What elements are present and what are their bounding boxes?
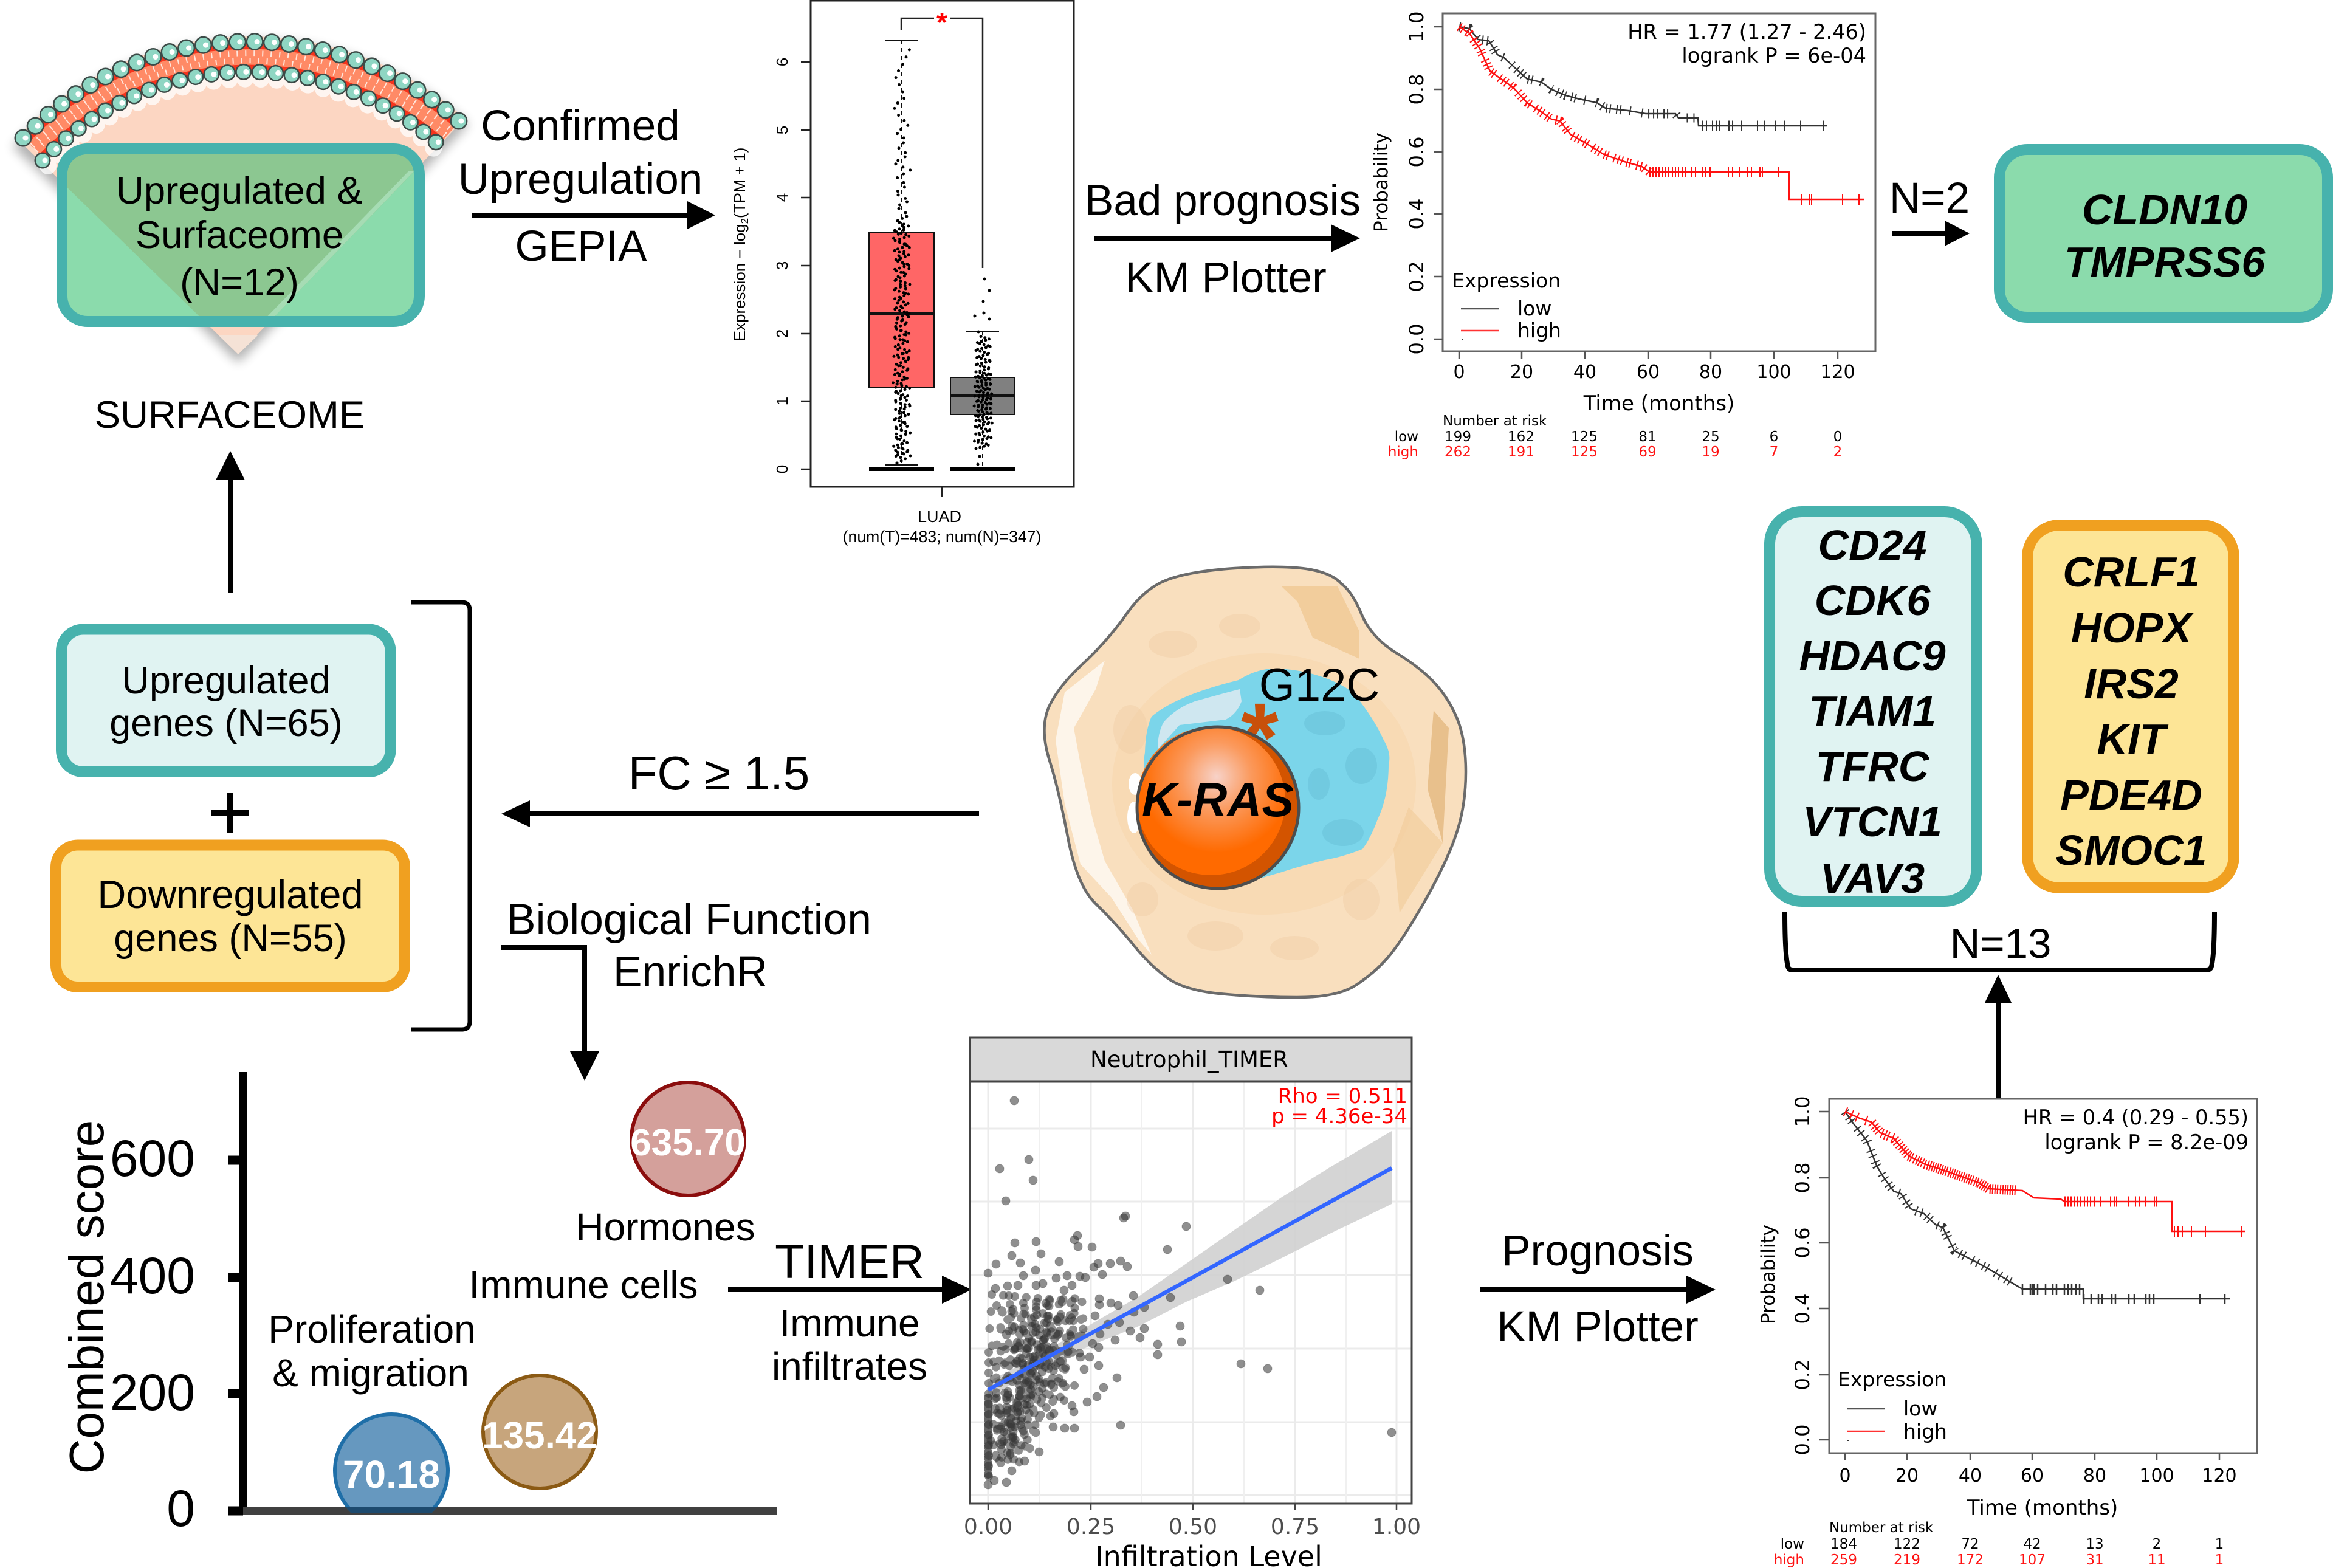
number at risk table: 162 (1508, 429, 1534, 445)
arrow: to CLDN10 TMPRSS6 box (1892, 221, 1970, 246)
strip header (970, 1037, 1412, 1081)
number at risk table: high (1388, 444, 1418, 460)
hazard ratio annotation: logrank P = 6e-04 (1682, 44, 1866, 67)
label: prognosis KM plotter: Prognosis (1502, 1227, 1694, 1275)
label: biological function EnrichR: Biological Function (507, 895, 871, 944)
axes (1757, 1096, 2257, 1520)
label: FC threshold: FC ≥ 1.5 (628, 746, 809, 800)
significance bracket: * (936, 7, 947, 38)
gene list: downregulated: KIT (2097, 715, 2169, 763)
legend: high (1517, 318, 1561, 342)
arrow: to bottom KM plot (1480, 1276, 1716, 1304)
illustration: cell with K-RAS (1044, 567, 1466, 997)
number at risk table: Number at risk (1829, 1520, 1934, 1536)
number at risk table: 81 (1638, 429, 1657, 445)
y axis and frame: 1 (773, 397, 791, 405)
box: upregulated and surfaceome: Upregulated & (116, 170, 363, 212)
y axis and frame (730, 1, 1074, 497)
low curve (1459, 27, 1827, 126)
number at risk table: high (1774, 1552, 1804, 1568)
arrow: up to surfaceome (216, 451, 245, 593)
box: downregulated genes: Downregulated (97, 872, 363, 916)
number at risk table: 259 (1830, 1552, 1857, 1568)
number at risk table: 107 (2019, 1552, 2046, 1568)
axes: 120 (1820, 362, 1855, 383)
gene list: upregulated: TFRC (1816, 743, 1930, 790)
label: N=2: N=2 (1889, 174, 1970, 222)
plot frame and grid (970, 1082, 1412, 1504)
arrow: cell to genes (501, 800, 979, 827)
axes: 20 (1510, 362, 1533, 383)
label: prognosis KM plotter (1497, 1227, 1699, 1351)
label: confirmed upregulation GEPIA: GEPIA (515, 222, 647, 270)
number at risk table: 0 (1833, 429, 1842, 445)
chart: combined score bubble plot (60, 1072, 777, 1537)
hazard ratio annotation (1627, 20, 1866, 67)
axis and labels (964, 1082, 1421, 1568)
legend: Expression (1452, 269, 1561, 292)
number at risk table: 125 (1571, 444, 1598, 460)
label: bad prognosis KM plotter: Bad prognosis (1085, 177, 1361, 225)
cell shading (1056, 586, 1449, 960)
label: confirmed upregulation GEPIA: Confirmed (481, 102, 680, 150)
icon: plus sign (211, 793, 249, 833)
bubble labels: Proliferation (268, 1307, 476, 1351)
axes: 0.8 (1405, 74, 1428, 105)
label: TIMER immune infiltrates: infiltrates (772, 1344, 927, 1388)
legend: high (1903, 1420, 1947, 1443)
axis and labels: 0.00 (964, 1515, 1012, 1539)
number at risk table: low (1395, 429, 1418, 445)
hazard ratio annotation: HR = 1.77 (1.27 - 2.46) (1627, 20, 1866, 44)
number at risk table: 219 (1894, 1552, 1920, 1568)
axes: 80 (2083, 1465, 2106, 1487)
asterisk mutation mark: * (1241, 683, 1279, 791)
axes: 1.0 (1791, 1096, 1814, 1127)
number at risk table: 25 (1702, 429, 1720, 445)
high curve (1459, 27, 1864, 205)
legend (1838, 1367, 1947, 1443)
number at risk table (1388, 413, 1842, 460)
gene list: downregulated (2027, 525, 2234, 888)
number at risk table: 19 (1702, 444, 1720, 460)
box: upregulated genes: Upregulated (122, 659, 331, 702)
axes: 100 (1756, 362, 1792, 383)
label: confirmed upregulation GEPIA (458, 102, 703, 270)
box: upregulated and surfaceome: (N=12) (180, 261, 299, 304)
bubble labels: Immune cells (469, 1263, 698, 1307)
gene list: upregulated: CD24 (1818, 521, 1926, 569)
nucleus (1144, 669, 1389, 879)
heading: SURFACEOME: SURFACEOME (95, 394, 365, 436)
axes: 60 (1637, 362, 1660, 383)
axes: 0 (1839, 1465, 1851, 1487)
low curve (1845, 1112, 2230, 1304)
number at risk table: 199 (1445, 429, 1471, 445)
axes: 0.0 (1405, 324, 1428, 354)
axes: 0.2 (1405, 261, 1428, 292)
y axis and frame: 2 (773, 329, 791, 338)
label: biological function EnrichR: EnrichR (613, 947, 768, 996)
number at risk table: 42 (2023, 1536, 2041, 1552)
axis: 0 (167, 1480, 195, 1537)
high curve (1845, 1112, 2245, 1237)
x axis labels: (num(T)=483; num(N)=347) (843, 528, 1041, 546)
axes: 120 (2202, 1465, 2237, 1487)
number at risk table: 125 (1571, 429, 1598, 445)
bracket: gene groups (411, 602, 470, 1030)
y axis and frame: Expression − log (730, 224, 749, 341)
bubble: immune cells: 135.42 (482, 1415, 597, 1457)
chart: Neutrophil TIMER scatter (964, 1037, 1421, 1568)
bracket: N=13: N=13 (1950, 920, 2051, 967)
hazard ratio annotation: HR = 0.4 (0.29 - 0.55) (2023, 1106, 2249, 1129)
box: upregulated and surfaceome (57, 143, 425, 327)
axis and labels: 0.75 (1271, 1515, 1319, 1539)
bubble: proliferation and migration: 70.18 (343, 1453, 440, 1496)
gene list: downregulated: IRS2 (2084, 660, 2179, 707)
hazard ratio annotation (2023, 1106, 2249, 1154)
correlation annotation: Rho = 0.511 (1278, 1084, 1407, 1109)
axis: 200 (110, 1364, 195, 1421)
gene list: upregulated (1770, 512, 1976, 902)
label: bad prognosis KM plotter: KM Plotter (1125, 254, 1327, 302)
axes: Time (months) (1583, 391, 1734, 416)
number at risk table: 122 (1894, 1536, 1920, 1552)
y axis and frame: (TPM + 1) (730, 148, 749, 218)
membrane blebs (1127, 773, 1142, 833)
bubble: immune cells (482, 1375, 597, 1488)
box: upregulated genes: genes (N=65) (109, 702, 343, 744)
number at risk table: 2 (1833, 444, 1842, 460)
number at risk table: 13 (2086, 1536, 2104, 1552)
scatter points (984, 1096, 1396, 1489)
axis and labels: 0.50 (1169, 1515, 1217, 1539)
cell body (1044, 567, 1466, 997)
label: prognosis KM plotter: KM Plotter (1497, 1303, 1699, 1351)
axis: 400 (110, 1247, 195, 1304)
axis: Combined score (60, 1120, 114, 1474)
icon: membrane fan (13, 36, 469, 363)
number at risk table: 191 (1508, 444, 1534, 460)
arrow: to box plot (472, 201, 715, 229)
box: upregulated and surfaceome: Surfaceome (136, 214, 343, 256)
number at risk table: 7 (1770, 444, 1778, 460)
y axis and frame: 5 (773, 126, 791, 134)
axis and labels: 0.25 (1067, 1515, 1115, 1539)
legend: low (1903, 1397, 1937, 1420)
box: CLDN10 and TMPRSS6: TMPRSS6 (2064, 238, 2266, 286)
correlation annotation: p = 4.36e-34 (1271, 1104, 1407, 1129)
bubble: hormones (630, 1082, 746, 1195)
axis (60, 1072, 777, 1537)
number at risk table: 72 (1961, 1536, 1979, 1552)
arrow: prognosis up to N=13 (1985, 975, 2012, 1098)
gene list: downregulated: HOPX (2071, 604, 2194, 652)
label: confirmed upregulation GEPIA: Upregulation (458, 156, 703, 204)
axes: 80 (1699, 362, 1722, 383)
y axis and frame: 3 (773, 261, 791, 270)
number at risk table: 172 (1957, 1552, 1984, 1568)
axes: 0.6 (1791, 1228, 1814, 1258)
number at risk table: 184 (1830, 1536, 1857, 1552)
bubble labels: & migration (272, 1351, 469, 1395)
bubble: proliferation and migration (333, 1412, 450, 1513)
axes (1370, 12, 1875, 416)
bubble labels: Hormones (576, 1205, 755, 1249)
bubble labels (268, 1205, 755, 1395)
y axis and frame: 6 (773, 58, 791, 66)
arrow: to top KM plot (1094, 224, 1360, 252)
x axis labels (843, 507, 1041, 546)
axis: 600 (110, 1130, 195, 1187)
legend: Expression (1838, 1367, 1946, 1391)
number at risk table: 31 (2086, 1552, 2104, 1568)
number at risk table: 262 (1445, 444, 1471, 460)
number at risk table: 6 (1770, 429, 1778, 445)
axes: 0.0 (1791, 1425, 1814, 1455)
strip header: Neutrophil_TIMER (1090, 1047, 1288, 1073)
tumor points (893, 46, 911, 463)
confidence band (988, 1131, 1392, 1398)
panel: surfaceome membrane fan with upregulated and surfaceome box (13, 36, 469, 363)
gene list: upregulated: HDAC9 (1799, 632, 1946, 679)
x axis labels: LUAD (918, 507, 961, 526)
gene list: downregulated: PDE4D (2060, 771, 2202, 819)
regression line (988, 1168, 1392, 1390)
axes: 0.4 (1791, 1293, 1814, 1324)
label: TIMER immune infiltrates (772, 1234, 927, 1388)
label: TIMER immune infiltrates: TIMER (775, 1234, 924, 1288)
axes: Time (months) (1967, 1496, 2118, 1520)
G12C label: G12C (1259, 659, 1380, 711)
arrow: EnrichR to bubble chart (501, 945, 599, 1081)
axes: 40 (1573, 362, 1596, 383)
chart: LUAD box plot (730, 1, 1074, 546)
legend (1452, 269, 1561, 342)
box: upregulated genes (61, 630, 390, 772)
number at risk table: 2 (2153, 1536, 2161, 1552)
K-RAS sphere (1137, 727, 1299, 889)
y axis and frame: 0 (773, 465, 791, 473)
y axis and frame: 4 (773, 193, 791, 202)
gene list: upregulated: CDK6 (1815, 577, 1931, 624)
axes: 20 (1895, 1465, 1919, 1487)
axes: 1.0 (1405, 12, 1428, 42)
number at risk table: low (1781, 1536, 1804, 1552)
number at risk table: 1 (2215, 1536, 2224, 1552)
legend: low (1517, 297, 1551, 320)
label: TIMER immune infiltrates: Immune (779, 1301, 920, 1345)
number at risk table: Number at risk (1443, 413, 1547, 429)
gene list: upregulated: VTCN1 (1802, 798, 1942, 845)
label: bad prognosis KM plotter (1085, 177, 1361, 302)
gene list: upregulated: TIAM1 (1809, 687, 1936, 735)
number at risk table (1774, 1520, 2224, 1568)
box: downregulated genes: genes (N=55) (114, 917, 347, 960)
normal box (950, 331, 1015, 471)
label: biological function EnrichR (507, 895, 871, 996)
axes: Probability (1370, 132, 1392, 232)
axes: 0.2 (1791, 1360, 1814, 1390)
number at risk table: 1 (2215, 1552, 2224, 1568)
axes: Probability (1757, 1225, 1779, 1324)
axes: 60 (2021, 1465, 2044, 1487)
box: CLDN10 and TMPRSS6: CLDN10 (2082, 186, 2247, 233)
bracket: N=13 (1785, 912, 2214, 970)
axes: 40 (1959, 1465, 1982, 1487)
hazard ratio annotation: logrank P = 8.2e-09 (2044, 1130, 2249, 1154)
significance bracket (901, 7, 983, 268)
bubble: hormones: 635.70 (630, 1122, 746, 1164)
axis and labels: 1.00 (1372, 1515, 1421, 1539)
arrow: immune cells to TIMER scatter (728, 1276, 972, 1304)
y axis and frame: 2 (739, 218, 751, 224)
box: CLDN10 and TMPRSS6 (1999, 150, 2328, 317)
correlation annotation (1271, 1084, 1407, 1129)
chart: bottom Kaplan-Meier plot (1757, 1096, 2257, 1568)
axes: 0.6 (1405, 137, 1428, 167)
K-RAS sphere: K-RAS (1142, 772, 1294, 827)
gene list: upregulated: VAV3 (1820, 854, 1925, 902)
tumor box (869, 40, 934, 471)
axes: 100 (2139, 1465, 2174, 1487)
box: downregulated genes (56, 845, 405, 987)
axes: 0.8 (1791, 1163, 1814, 1193)
number at risk table: 69 (1638, 444, 1657, 460)
normal points (974, 279, 992, 464)
gene list: downregulated: SMOC1 (2056, 827, 2207, 874)
axes: 0 (1453, 362, 1465, 383)
axes: 0.4 (1405, 199, 1428, 229)
chart: top Kaplan-Meier plot (1370, 12, 1875, 460)
number at risk table: 11 (2148, 1552, 2166, 1568)
gene list: downregulated: CRLF1 (2063, 548, 2200, 596)
